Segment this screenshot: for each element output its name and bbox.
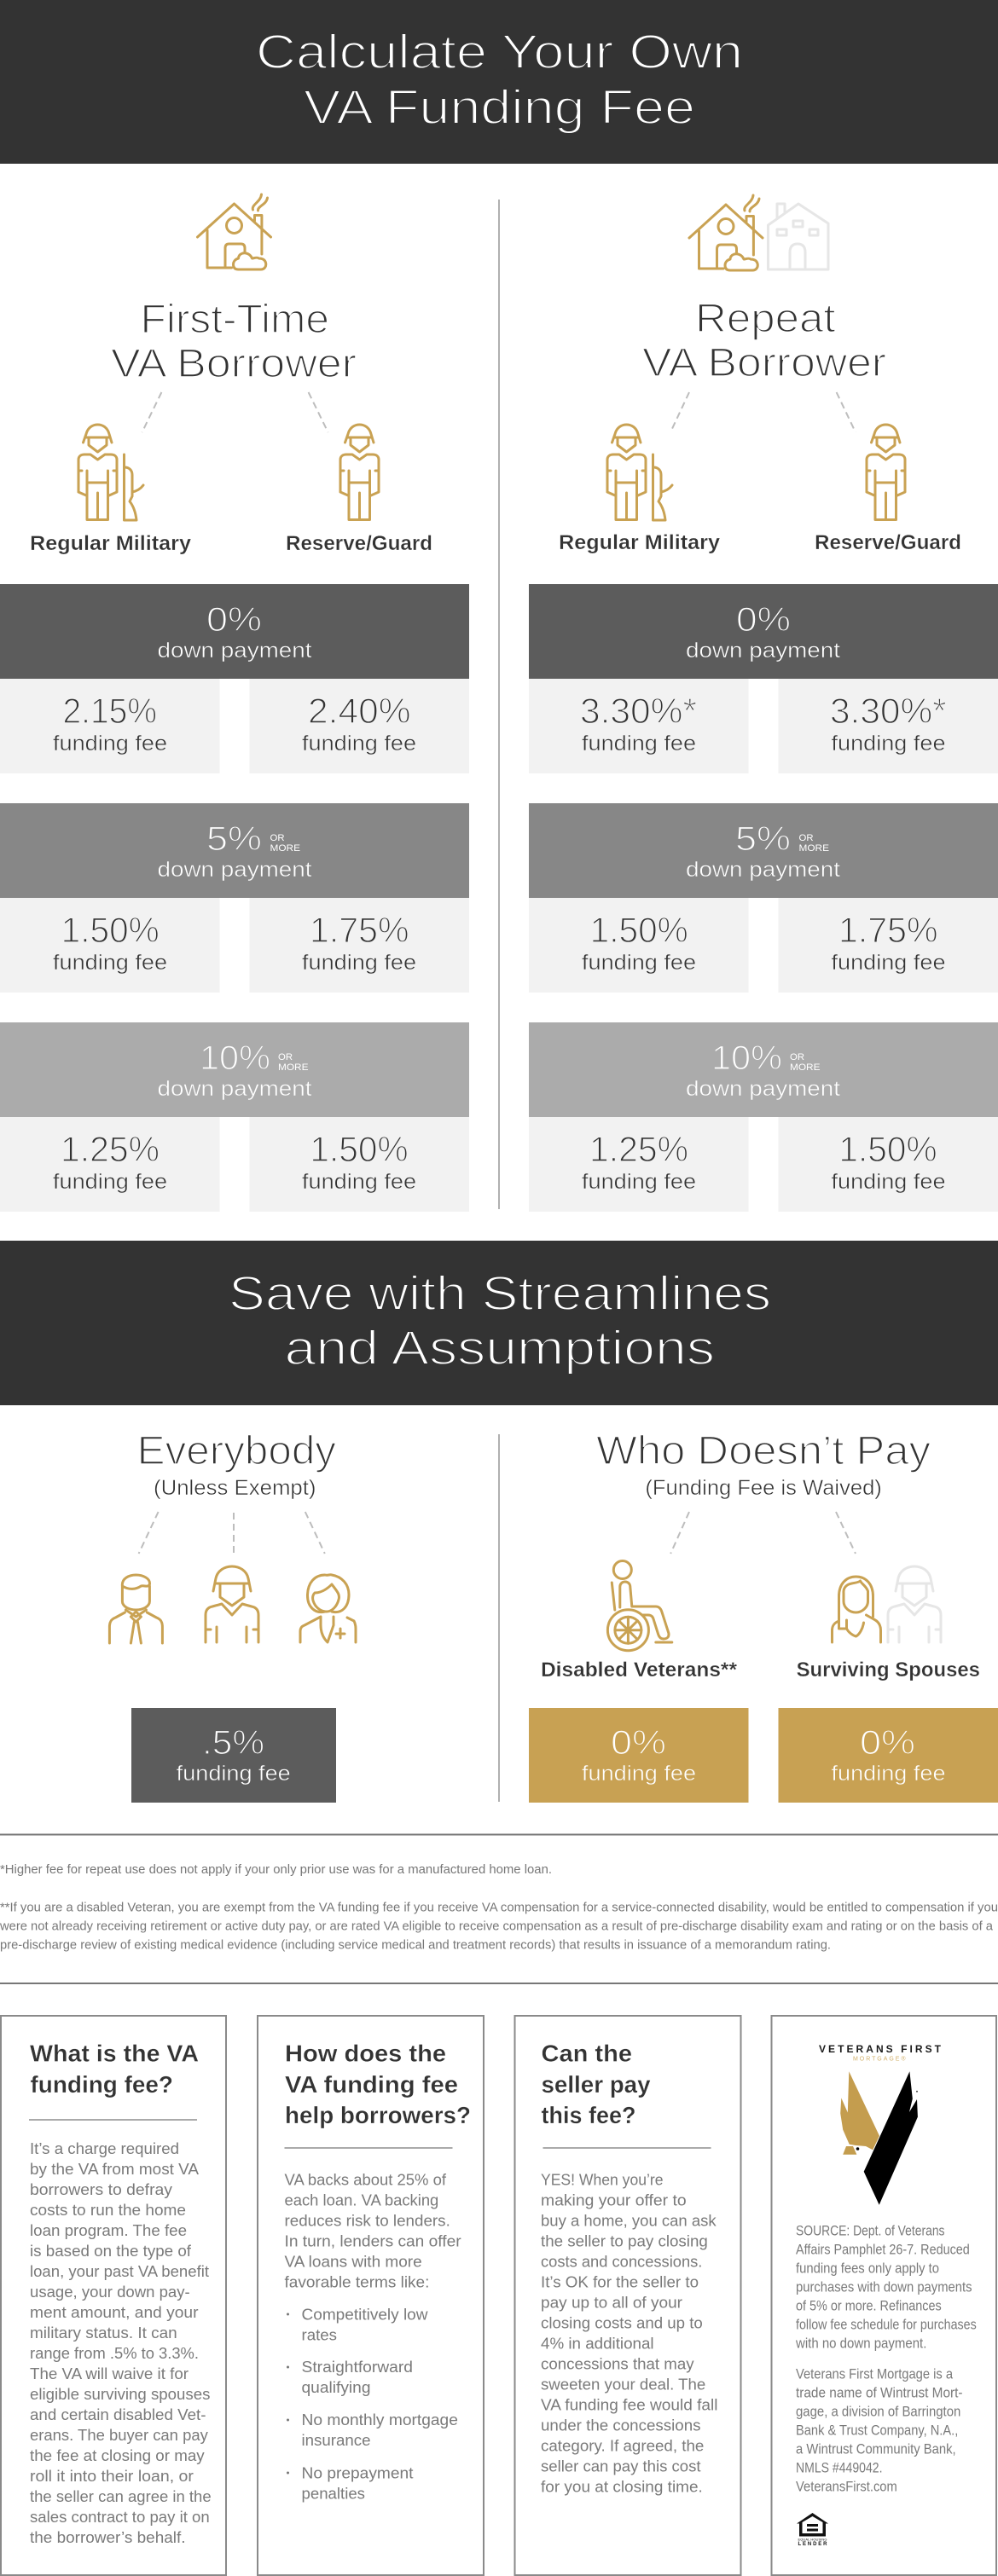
label: reserve guard: Reserve/Guard	[815, 531, 961, 554]
bar: 0% down payment: 0%	[206, 601, 262, 639]
body text: The VA will waive it for	[30, 2365, 189, 2382]
cell: 1.75% reserve	[778, 898, 998, 993]
cell: 1.25% regular	[529, 1117, 749, 1212]
body text: pay up to all of your	[541, 2294, 682, 2312]
body text: and certain disabled Vet-	[30, 2405, 206, 2423]
bullet list: No monthly mortgage	[302, 2411, 458, 2428]
body text: for you at closing time.	[541, 2478, 703, 2496]
icon: regular military soldier	[78, 425, 143, 520]
panel: can the seller pay	[515, 2016, 740, 2575]
heading: first-time VA borrower: VA Borrower	[111, 340, 357, 385]
cell: 1.50% regular	[0, 898, 220, 993]
bar: 10% or more down payment: 10%	[200, 1039, 270, 1077]
footnotes: *Higher fee for repeat use does not apply if your only prior use was for a manufactured home loan.	[0, 1862, 552, 1877]
cell: 2.40% reserve: funding fee	[302, 732, 416, 755]
heading: How does the	[285, 2040, 446, 2067]
icon: house with person and second house	[689, 195, 828, 270]
box: .5% funding fee: .5%	[202, 1724, 264, 1762]
subheading: unless exempt: (Unless Exempt)	[154, 1476, 316, 1500]
bullet list	[287, 2306, 458, 2502]
cell: 3.30% reserve: funding fee	[831, 732, 945, 755]
body text: erans. The buyer can pay	[30, 2426, 209, 2444]
panel: repeat 10% down	[529, 1022, 998, 1212]
connector lines	[670, 392, 856, 432]
cell: 1.50% reserve: 1.50%	[310, 1129, 409, 1169]
heading: this fee?	[541, 2102, 636, 2128]
heading: everybody: Everybody	[137, 1427, 337, 1473]
company text: Bank & Trust Company, N.A.,	[796, 2423, 958, 2439]
header: calculate your own	[0, 0, 998, 164]
bar: 0% down payment: 0%	[736, 601, 791, 639]
cell: 1.25% regular	[0, 1117, 220, 1212]
heading: first-time VA borrower	[111, 296, 357, 385]
heading: help borrowers?	[285, 2102, 471, 2128]
heading: repeat VA borrower	[642, 295, 886, 385]
box: 0% surviving spouses	[778, 1708, 998, 1803]
body text	[285, 2171, 461, 2291]
cell: 2.40% reserve	[249, 679, 469, 773]
bar: 5% or more down payment	[529, 803, 998, 898]
company text: trade name of Wintrust Mort-	[796, 2385, 962, 2401]
icon: businessman	[109, 1575, 162, 1643]
center divider	[498, 1434, 500, 1802]
heading: VA funding fee	[285, 2071, 458, 2098]
heading: What is the VA	[30, 2040, 199, 2067]
body text: making your offer to	[541, 2191, 687, 2209]
rule	[543, 2147, 711, 2149]
heading: who doesn't pay: Who Doesn’t Pay	[596, 1427, 931, 1473]
cell: 1.75% reserve: funding fee	[302, 951, 416, 975]
heading: seller pay	[541, 2071, 651, 2098]
body text: the seller to pay closing	[541, 2232, 708, 2250]
cell: 2.15% regular	[0, 679, 220, 773]
title: Save with Streamlines	[229, 1266, 771, 1321]
panel: repeat 0% down	[529, 584, 998, 773]
source text: SOURCE: Dept. of Veterans	[796, 2223, 945, 2239]
label: disabled veterans: Disabled Veterans**	[541, 1658, 738, 1682]
icon: wheelchair	[607, 1560, 672, 1651]
bar: 5% or more down payment	[0, 803, 469, 898]
panel: who doesn't pay	[529, 1427, 998, 1803]
cell: 3.30% reserve	[778, 679, 998, 773]
body text: sweeten your deal. The	[541, 2376, 705, 2394]
panel: repeat 5% down	[529, 803, 998, 993]
body text: closing costs and up to	[541, 2314, 703, 2332]
bullet list: penalties	[302, 2484, 365, 2502]
body text: seller can pay this cost	[541, 2457, 701, 2475]
cell: 1.25% regular: 1.25%	[61, 1129, 160, 1169]
logo: veterans first mortgage: VETERANS FIRST	[819, 2043, 942, 2055]
bullet list: insurance	[302, 2431, 370, 2449]
bar: 10% or more down payment: 10%	[711, 1039, 782, 1077]
body text: It’s OK for the seller to	[541, 2273, 699, 2291]
source text	[795, 2223, 977, 2352]
logo: veterans first mortgage: MORTGAGE®	[853, 2055, 906, 2062]
footnotes	[0, 1833, 998, 1984]
company text: gage, a division of Barrington	[796, 2404, 960, 2420]
cell: 1.50% regular	[529, 898, 749, 993]
footnotes: pre-discharge review of existing medical evidence (including service medical and treatment records) that results in issuance of a memorandum rating.	[0, 1937, 831, 1953]
bar: 10% or more down payment	[0, 1022, 469, 1117]
bar: 5% or more down payment: OR	[270, 833, 285, 843]
body text: favorable terms like:	[285, 2273, 429, 2291]
body text: loan program. The fee	[30, 2221, 187, 2239]
label: regular military: Regular Military	[30, 532, 192, 555]
bar: 10% or more down payment: OR	[278, 1052, 293, 1062]
footnotes: **If you are a disabled Veteran, you are exempt from the VA funding fee if you receive VA compensation for a service-connected disability, would be entitled to compensation if you	[0, 1900, 998, 1915]
cell: 1.75% reserve	[249, 898, 469, 993]
body text: usage, your down pay-	[30, 2283, 190, 2301]
body text: YES! When you’re	[541, 2171, 664, 2189]
bar: 0% down payment: down payment	[686, 639, 840, 663]
body text	[30, 2139, 212, 2546]
bar: 5% or more down payment: 5%	[206, 820, 262, 858]
cell: 1.25% regular: funding fee	[53, 1170, 167, 1194]
panel: how does the fee help	[258, 2016, 484, 2575]
bullet list: rates	[302, 2326, 337, 2344]
center divider	[498, 200, 500, 1209]
source text: with no down payment.	[795, 2336, 926, 2352]
cell: 1.25% regular: 1.25%	[589, 1129, 688, 1169]
cell: 1.50% regular: funding fee	[582, 951, 696, 975]
heading: funding fee?	[31, 2071, 173, 2098]
source text: funding fees only apply to	[796, 2261, 939, 2277]
bullet list: qualifying	[302, 2378, 370, 2396]
box: 0% disabled veterans: 0%	[611, 1724, 666, 1762]
body text: VA loans with more	[285, 2253, 422, 2271]
bar: 5% or more down payment: down payment	[157, 858, 312, 882]
company text: NMLS #449042.	[796, 2460, 882, 2476]
body text	[541, 2171, 718, 2496]
subheading: funding fee is waived: (Funding Fee is Waived)	[645, 1476, 882, 1500]
bar: 0% down payment	[529, 584, 998, 679]
cell: 3.30% regular: funding fee	[582, 732, 696, 755]
body text: It’s a charge required	[30, 2139, 179, 2157]
body text: the fee at closing or may	[30, 2446, 205, 2464]
body text: costs and concessions.	[541, 2253, 702, 2271]
cell: 1.50% reserve: 1.50%	[838, 1129, 937, 1169]
panel: what is the VA funding fee	[1, 2016, 226, 2575]
bullet list: Competitively low	[302, 2306, 428, 2324]
cell: 1.50% reserve: funding fee	[302, 1170, 416, 1194]
icon: surviving spouse with faded soldier	[833, 1566, 941, 1642]
bar: 10% or more down payment: OR	[790, 1052, 804, 1062]
bar: 5% or more down payment: OR	[798, 833, 814, 843]
rule	[285, 2147, 452, 2149]
heading: Can the	[541, 2040, 632, 2067]
icon: soldier bust	[206, 1566, 258, 1642]
company text: VeteransFirst.com	[796, 2479, 897, 2495]
body text: reduces risk to lenders.	[285, 2212, 450, 2230]
bar: 5% or more down payment: MORE	[798, 843, 829, 854]
cell: 1.50% reserve	[249, 1117, 469, 1212]
icon: equal housing lender: LENDER	[798, 2542, 827, 2547]
label: regular military: Regular Military	[559, 531, 721, 554]
connector lines	[142, 392, 328, 432]
connector lines	[139, 1512, 325, 1554]
icon: equal housing lender	[797, 2513, 828, 2547]
cell: 2.40% reserve: 2.40%	[308, 691, 411, 731]
body text: each loan. VA backing	[285, 2191, 438, 2209]
footnotes: were not already receiving retirement or active duty pay, or are rated VA eligible to receive compensation as a result of pre-discharge disability exam and rating or on the basis of a	[0, 1919, 994, 1934]
bar: 10% or more down payment: down payment	[157, 1077, 312, 1101]
body text: is based on the type of	[30, 2242, 192, 2260]
body text: military status. It can	[30, 2324, 177, 2342]
body text: concessions that may	[541, 2355, 694, 2373]
heading	[541, 2040, 651, 2128]
cell: 3.30% reserve: 3.30%*	[830, 691, 947, 731]
cell: 1.50% reserve	[778, 1117, 998, 1212]
cell: 1.75% reserve: funding fee	[831, 951, 945, 975]
rule	[29, 2120, 197, 2121]
label: surviving spouses: Surviving Spouses	[797, 1658, 980, 1682]
cell: 3.30% regular: 3.30%*	[580, 691, 697, 731]
icon: reserve guard soldier	[340, 425, 379, 520]
cell: 1.50% regular: funding fee	[53, 951, 167, 975]
bar: 0% down payment: down payment	[157, 639, 312, 663]
body text: by the VA from most VA	[30, 2160, 200, 2178]
bar: 5% or more down payment: down payment	[686, 858, 840, 882]
heading	[30, 2040, 199, 2098]
bar: 10% or more down payment: MORE	[278, 1062, 309, 1073]
cell: 3.30% regular	[529, 679, 749, 773]
box: 0% surviving spouses: funding fee	[831, 1762, 945, 1786]
source text: Affairs Pamphlet 26-7. Reduced	[796, 2242, 970, 2258]
panel: first-time 0% down	[0, 584, 469, 773]
body text: the seller can agree in the	[30, 2487, 212, 2505]
bar: 5% or more down payment: MORE	[270, 843, 300, 854]
cell: 1.25% regular: funding fee	[582, 1170, 696, 1194]
cell: 1.75% reserve: 1.75%	[838, 910, 938, 950]
company text: Veterans First Mortgage is a	[796, 2366, 953, 2382]
bar: 0% down payment	[0, 584, 469, 679]
body text: ment amount, and your	[30, 2303, 198, 2321]
panel: everybody	[109, 1427, 356, 1803]
body text: VA funding fee would fall	[541, 2396, 718, 2414]
cell: 2.15% regular: funding fee	[53, 732, 167, 755]
box: 0% surviving spouses: 0%	[860, 1724, 915, 1762]
title: and Assumptions	[285, 1321, 715, 1375]
body text: eligible surviving spouses	[30, 2385, 210, 2403]
bar: 5% or more down payment: 5%	[735, 820, 791, 858]
box: .5% funding fee: funding fee	[177, 1762, 291, 1786]
label: reserve guard: Reserve/Guard	[286, 532, 432, 555]
body text: sales contract to pay it on	[30, 2508, 210, 2526]
bar: 10% or more down payment	[529, 1022, 998, 1117]
body text: loan, your past VA benefit	[30, 2262, 209, 2280]
logo: veterans first mortgage	[819, 2043, 942, 2205]
header: save with streamlines	[0, 1241, 998, 1405]
cell: 2.15% regular: 2.15%	[63, 691, 157, 731]
bar: 10% or more down payment: down payment	[686, 1077, 840, 1101]
cell: 1.50% regular: 1.50%	[61, 910, 160, 950]
bullet list: Straightforward	[302, 2358, 413, 2376]
connector lines	[670, 1512, 856, 1554]
body text: category. If agreed, the	[541, 2437, 704, 2455]
bar: 10% or more down payment: MORE	[790, 1062, 821, 1073]
icon: regular military soldier	[607, 425, 672, 520]
body text: buy a home, you can ask	[541, 2212, 717, 2230]
body text: the borrower’s behalf.	[30, 2528, 186, 2546]
panel: repeat borrower header	[559, 195, 961, 554]
panel: first-time 10% down	[0, 1022, 469, 1212]
source text: of 5% or more. Refinances	[796, 2298, 942, 2314]
body text: roll it into their loan, or	[30, 2467, 194, 2485]
cell: 1.75% reserve: 1.75%	[310, 910, 409, 950]
body text: In turn, lenders can offer	[285, 2232, 461, 2250]
icon: reserve guard soldier	[867, 425, 905, 520]
panel: first-time borrower header	[30, 194, 432, 555]
icon: woman doctor	[300, 1575, 356, 1642]
title	[256, 25, 743, 135]
cell: 1.50% reserve: funding fee	[831, 1170, 945, 1194]
cell: 1.50% regular: 1.50%	[590, 910, 688, 950]
source text: purchases with down payments	[796, 2279, 972, 2295]
icon: equal housing lender: EQUAL HOUSING	[798, 2538, 827, 2541]
body text: borrowers to defray	[30, 2180, 173, 2198]
title: VA Funding Fee	[304, 80, 695, 135]
box: 0% disabled veterans: funding fee	[582, 1762, 696, 1786]
heading: repeat VA borrower: Repeat	[695, 295, 836, 340]
title: Calculate Your Own	[256, 25, 743, 79]
body text: under the concessions	[541, 2417, 701, 2434]
body text: 4% in additional	[541, 2335, 654, 2353]
box: .5% funding fee	[131, 1708, 336, 1803]
panel: source and logo	[771, 2016, 996, 2575]
heading: first-time VA borrower: First-Time	[140, 296, 329, 341]
company text: a Wintrust Community Bank,	[796, 2441, 956, 2457]
icon: house with person	[198, 194, 271, 269]
heading: repeat VA borrower: VA Borrower	[642, 339, 886, 385]
title	[229, 1266, 771, 1375]
heading	[285, 2040, 471, 2128]
body text: VA backs about 25% of	[285, 2171, 447, 2189]
body text: range from .5% to 3.3%.	[30, 2344, 199, 2362]
company text	[796, 2366, 962, 2495]
bullet list: No prepayment	[302, 2463, 413, 2481]
body text: costs to run the home	[30, 2201, 186, 2219]
panel: first-time 5% down	[0, 803, 469, 993]
box: 0% disabled veterans	[529, 1708, 749, 1803]
